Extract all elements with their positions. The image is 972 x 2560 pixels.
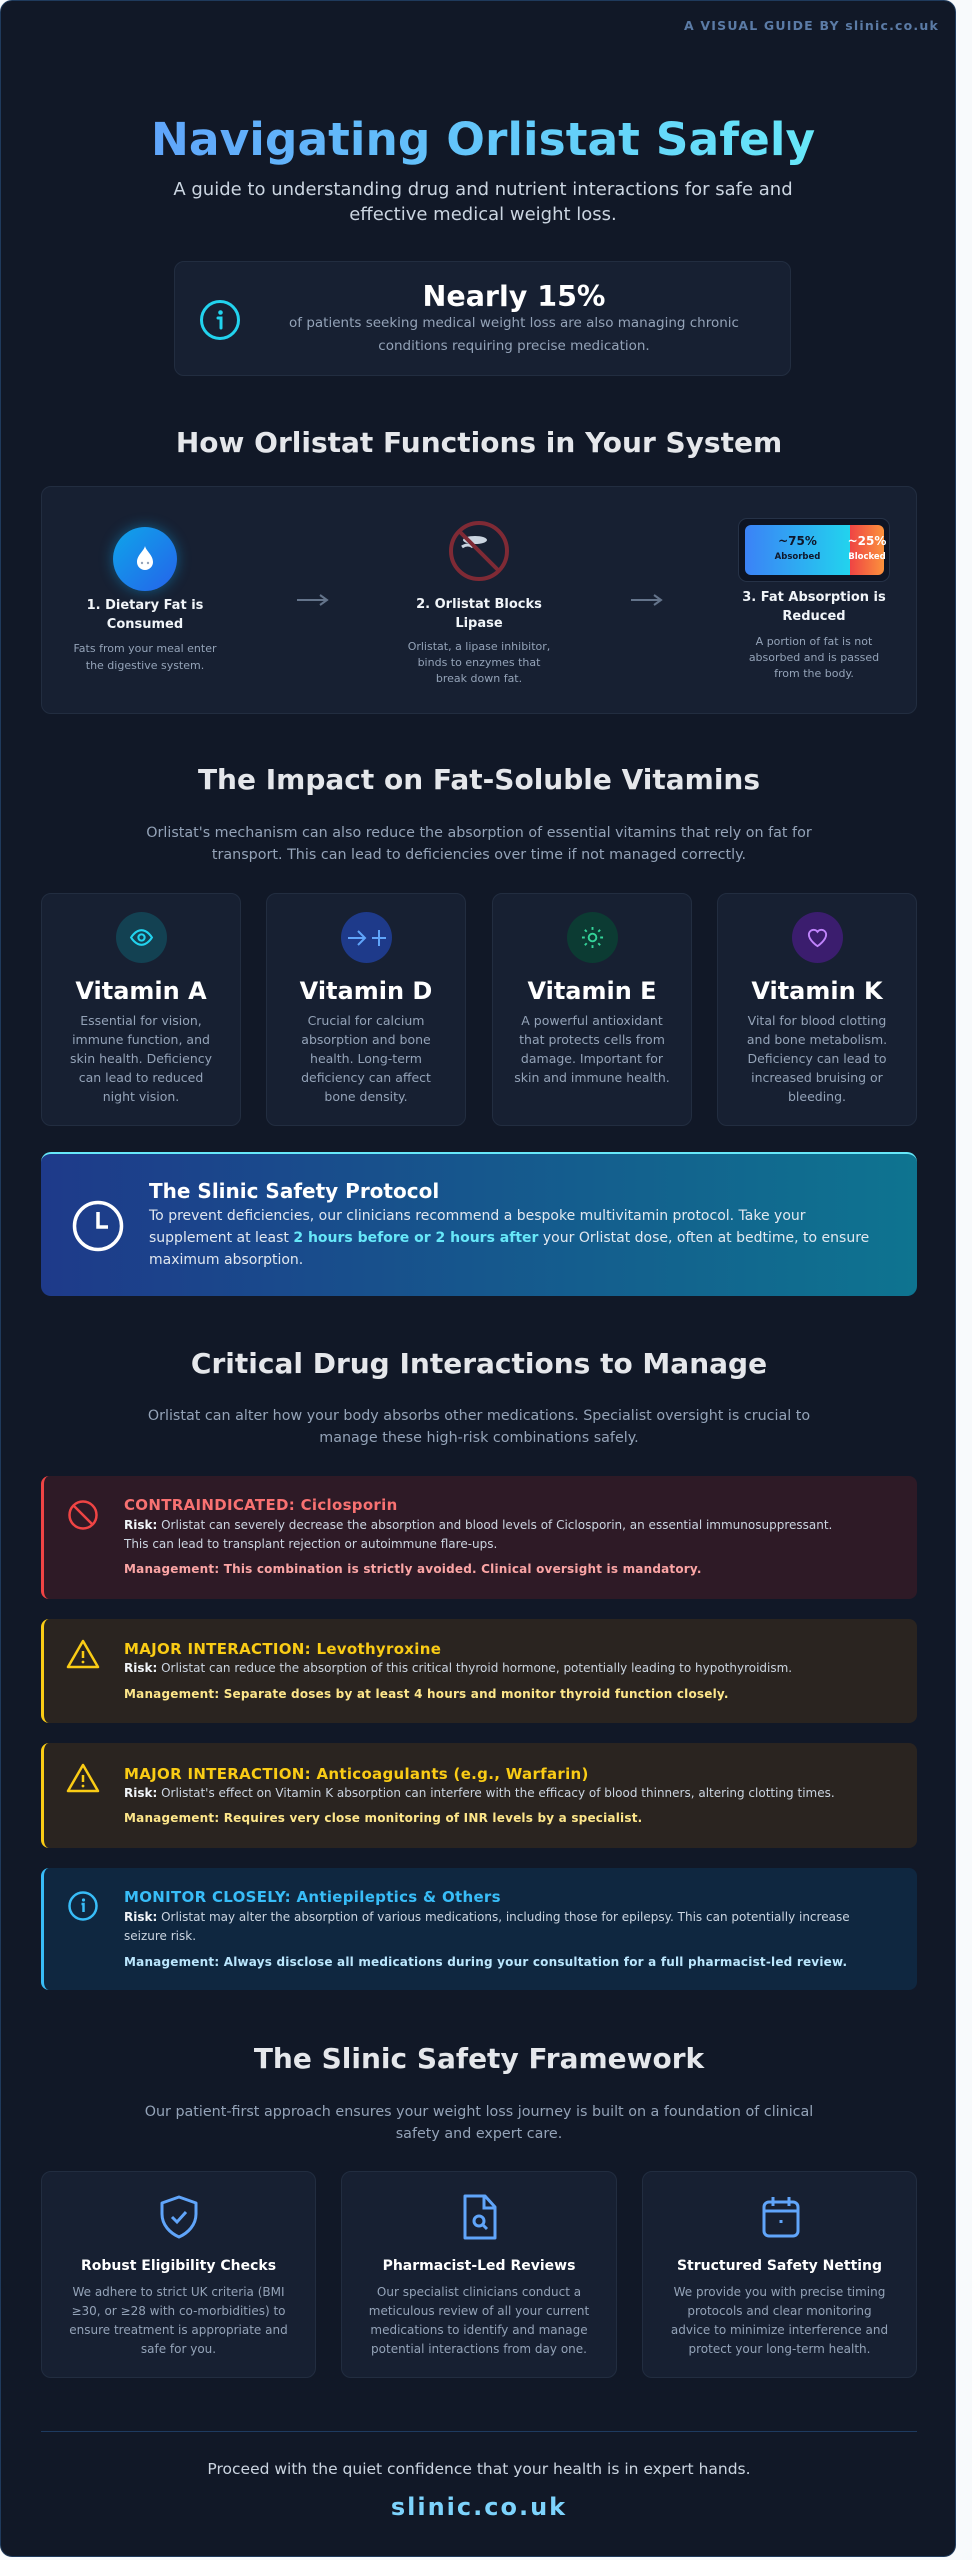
- vitamin D desc: [301, 1013, 431, 1104]
- vitamin E desc: that protects cells from: [519, 1032, 665, 1047]
- vitamin E name: Vitamin E: [527, 977, 657, 1005]
- vitamin D desc: bone density.: [324, 1089, 408, 1104]
- step 3 desc: absorbed and is passed: [749, 651, 879, 664]
- interaction: levothyroxine: [41, 1619, 917, 1723]
- vitamin K desc: Deficiency can lead to: [747, 1051, 887, 1066]
- vitamin D desc: Crucial for calcium: [308, 1013, 424, 1028]
- icon: heart: [792, 912, 843, 963]
- title: Pharmacist-Led Reviews: [383, 2258, 575, 2274]
- vitamin K name: Vitamin K: [751, 977, 883, 1005]
- step 2: [408, 521, 550, 685]
- risk: Risk: Orlistat can severely decrease the absorption and blood levels of Ciclosporin, an essential immunosuppressant.: [124, 1518, 832, 1532]
- callout: safety protocol: [41, 1152, 917, 1296]
- arrow 2: [631, 594, 662, 606]
- stat text: of patients seeking medical weight loss are also managing chronic: [289, 315, 739, 331]
- interactions intro: Orlistat can alter how your body absorbs other medications. Specialist oversight is crucial to: [148, 1408, 810, 1424]
- vitamin A desc: skin health. Deficiency: [70, 1051, 212, 1066]
- subtitle: [173, 179, 793, 225]
- step 2 title: Lipase: [455, 616, 503, 631]
- step 3 desc: [749, 635, 879, 680]
- vitamin E desc: [514, 1013, 670, 1085]
- desc: ≥30, or ≥28 with co-morbidities) to: [71, 2304, 286, 2318]
- icon: blocked lipase: [449, 521, 509, 581]
- step 3 title: Reduced: [782, 609, 846, 624]
- management: Management: Separate doses by at least 4 hours and monitor thyroid function closely.: [124, 1687, 729, 1701]
- stat text: [289, 315, 739, 354]
- icon: clock: [72, 1200, 124, 1252]
- risk: Risk: Orlistat can reduce the absorption of this critical thyroid hormone, potentially leading to hypothyroidism.: [124, 1661, 792, 1675]
- step 1: [73, 520, 217, 672]
- desc: medications to identify and manage: [370, 2323, 588, 2337]
- card: eligibility: [41, 2171, 316, 2378]
- desc: Our specialist clinicians conduct a: [377, 2285, 581, 2299]
- vitamin D desc: health. Long-term: [310, 1051, 422, 1066]
- vitamin K desc: [747, 1013, 887, 1104]
- interaction: ciclosporin: [41, 1476, 917, 1599]
- risk: This can lead to transplant rejection or autoimmune flare-ups.: [124, 1537, 497, 1551]
- step 2 title: [416, 597, 542, 631]
- vitamin E desc: A powerful antioxidant: [521, 1013, 663, 1028]
- footer site: slinic.co.uk: [391, 2493, 567, 2521]
- arrow 1: [297, 594, 328, 606]
- vitamin K desc: bleeding.: [788, 1089, 846, 1104]
- vitamin A desc: Essential for vision,: [80, 1013, 202, 1028]
- step 1 desc: the digestive system.: [86, 659, 204, 672]
- step 3 title: [742, 590, 886, 624]
- desc: protect your long-term health.: [688, 2342, 870, 2356]
- absorption bar: ~25%: [848, 534, 886, 548]
- stat number: Nearly 15%: [423, 280, 605, 313]
- heading: drug interactions: Critical Drug Interactions to Manage: [191, 1347, 767, 1380]
- vitamin D name: Vitamin D: [300, 977, 432, 1005]
- icon: sun: [567, 912, 618, 963]
- desc: protocols and clear monitoring: [687, 2304, 872, 2318]
- risk: Risk: Orlistat's effect on Vitamin K absorption can interfere with the efficacy of blood thinners, altering clotting times.: [124, 1786, 835, 1800]
- desc: [369, 2285, 589, 2356]
- step 1 title: [87, 598, 203, 632]
- icon: shield check: [160, 2196, 198, 2238]
- interaction: antiepileptics: [41, 1868, 917, 1990]
- icon: document search: [464, 2194, 496, 2240]
- vitamin E desc: skin and immune health.: [514, 1070, 670, 1085]
- step 3 title: 3. Fat Absorption is: [742, 590, 886, 605]
- icon: ban: [68, 1500, 98, 1530]
- vitamin D desc: absorption and bone: [301, 1032, 431, 1047]
- step 1 desc: [73, 642, 217, 672]
- risk: Risk: Orlistat may alter the absorption of various medications, including those for epilepsy. This can potentially increase: [124, 1910, 850, 1924]
- vitamin K desc: Vital for blood clotting: [748, 1013, 886, 1028]
- desc: [69, 2285, 288, 2356]
- header tag: A VISUAL GUIDE BY slinic.co.uk: [684, 18, 939, 33]
- protocol text: supplement at least 2 hours before or 2 hours after your Orlistat dose, often at bedtime, to ensure: [149, 1230, 869, 1246]
- heading: vitamins: The Impact on Fat-Soluble Vitamins: [198, 763, 760, 796]
- step 2 desc: binds to enzymes that: [418, 656, 540, 669]
- vitamin A desc: can lead to reduced: [79, 1070, 203, 1085]
- card: vitamin D: [266, 893, 466, 1126]
- subtitle: A guide to understanding drug and nutrient interactions for safe and: [173, 179, 793, 200]
- vitamin K desc: and bone metabolism.: [747, 1032, 887, 1047]
- step 1 title: Consumed: [107, 617, 183, 632]
- title: Navigating Orlistat Safely: [151, 113, 815, 166]
- panel: process: [41, 486, 917, 714]
- icon: arrow plus: [341, 912, 392, 963]
- vitamin A name: Vitamin A: [75, 977, 207, 1005]
- management: Management: Requires very close monitoring of INR levels by a specialist.: [124, 1811, 642, 1825]
- desc: We provide you with precise timing: [674, 2285, 885, 2299]
- interactions intro: manage these high-risk combinations safely.: [319, 1430, 639, 1446]
- card: vitamin A: [41, 893, 241, 1126]
- protocol title: The Slinic Safety Protocol: [149, 1179, 439, 1203]
- title: Robust Eligibility Checks: [81, 2258, 276, 2274]
- title: MAJOR INTERACTION: Anticoagulants (e.g., Warfarin): [124, 1765, 589, 1783]
- vitamin A desc: [70, 1013, 212, 1104]
- step 3 desc: from the body.: [774, 667, 854, 680]
- risk: [124, 1518, 832, 1551]
- desc: ensure treatment is appropriate and: [69, 2323, 288, 2337]
- vitamins intro: transport. This can lead to deficiencies over time if not managed correctly.: [212, 847, 746, 863]
- protocol text: [148, 1208, 869, 1268]
- vitamin K desc: increased bruising or: [751, 1070, 883, 1085]
- step 2 desc: break down fat.: [436, 672, 522, 685]
- interactions intro: [148, 1408, 810, 1446]
- vitamin D desc: deficiency can affect: [301, 1070, 431, 1085]
- icon: info: [200, 300, 240, 340]
- risk: [124, 1910, 850, 1943]
- desc: [671, 2285, 888, 2356]
- heading: how orlistat functions: How Orlistat Functions in Your System: [176, 426, 782, 459]
- interaction: anticoagulants: [41, 1743, 917, 1848]
- step 2 title: 2. Orlistat Blocks: [416, 597, 542, 612]
- icon: calendar: [762, 2197, 800, 2238]
- absorption bar: [738, 518, 890, 582]
- management: Management: Always disclose all medications during your consultation for a full pharmacist-led review.: [124, 1955, 847, 1969]
- card: pharmacist reviews: [341, 2171, 617, 2378]
- stat box: [174, 261, 791, 376]
- desc: meticulous review of all your current: [369, 2304, 589, 2318]
- stat text: conditions requiring precise medication.: [378, 338, 650, 354]
- card: vitamin K: [717, 893, 917, 1126]
- vitamin A desc: immune function, and: [72, 1032, 210, 1047]
- step 3 desc: A portion of fat is not: [756, 635, 872, 648]
- footer text: Proceed with the quiet confidence that your health is in expert hands.: [207, 2460, 751, 2478]
- title: MONITOR CLOSELY: Antiepileptics & Others: [124, 1888, 501, 1906]
- framework intro: Our patient-first approach ensures your weight loss journey is built on a foundation of clinical: [145, 2104, 813, 2120]
- desc: potential interactions from day one.: [371, 2342, 587, 2356]
- step 2 desc: Orlistat, a lipase inhibitor,: [408, 640, 550, 653]
- framework intro: safety and expert care.: [396, 2126, 562, 2142]
- icon: warning: [66, 1640, 100, 1668]
- title: MAJOR INTERACTION: Levothyroxine: [124, 1640, 441, 1658]
- icon: warning: [66, 1764, 100, 1792]
- step 2 desc: [408, 640, 550, 685]
- icon: eye: [116, 912, 167, 963]
- absorption bar: Blocked: [848, 552, 886, 562]
- framework intro: [145, 2104, 813, 2142]
- step 1 desc: Fats from your meal enter: [73, 642, 217, 655]
- risk: seizure risk.: [124, 1929, 196, 1943]
- management: Management: This combination is strictly avoided. Clinical oversight is mandatory.: [124, 1562, 702, 1576]
- heading: framework: The Slinic Safety Framework: [254, 2042, 704, 2075]
- vitamins intro: [146, 825, 812, 863]
- title: Structured Safety Netting: [677, 2258, 882, 2274]
- title: CONTRAINDICATED: Ciclosporin: [124, 1496, 398, 1514]
- vitamin A desc: night vision.: [103, 1089, 179, 1104]
- step 1 title: 1. Dietary Fat is: [87, 598, 203, 613]
- vitamin E desc: damage. Important for: [521, 1051, 663, 1066]
- icon: fat drop: [113, 527, 177, 591]
- desc: advice to minimize interference and: [671, 2323, 888, 2337]
- step 3: [738, 518, 890, 680]
- card: safety netting: [642, 2171, 917, 2378]
- protocol text: maximum absorption.: [149, 1252, 303, 1268]
- protocol text: To prevent deficiencies, our clinicians recommend a bespoke multivitamin protocol. Take your: [149, 1208, 806, 1224]
- card: vitamin E: [492, 893, 692, 1126]
- desc: We adhere to strict UK criteria (BMI: [72, 2285, 285, 2299]
- vitamins intro: Orlistat's mechanism can also reduce the absorption of essential vitamins that rely on fat for: [146, 825, 812, 841]
- icon: info: [68, 1891, 98, 1921]
- subtitle: effective medical weight loss.: [349, 204, 617, 225]
- absorption bar: ~75%: [778, 534, 817, 548]
- absorption bar: Absorbed: [775, 552, 820, 562]
- desc: safe for you.: [141, 2342, 216, 2356]
